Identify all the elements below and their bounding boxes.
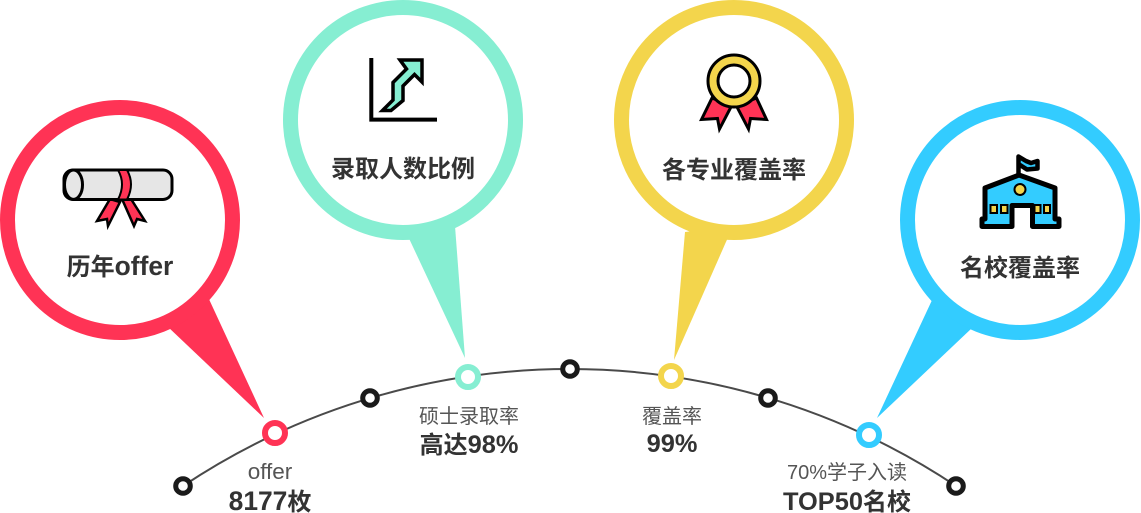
node: mint	[458, 367, 478, 387]
pin: historic offers	[8, 108, 264, 418]
label: top 50 schools: 70%学子入读	[787, 461, 907, 484]
heading: top school coverage: 名校覆盖率	[960, 255, 1080, 282]
icon: diploma scroll	[64, 170, 172, 226]
label: offer count: offer	[248, 459, 293, 484]
label: top 50 schools	[783, 461, 911, 513]
pin: major coverage	[622, 8, 846, 360]
icon: school building	[982, 156, 1059, 226]
label: coverage rate	[642, 405, 702, 458]
heading: major coverage: 各专业覆盖率	[662, 156, 806, 184]
pin: admission ratio	[290, 8, 516, 358]
icon: rising arrow chart	[371, 58, 437, 120]
label: master admission rate: 高达98%	[420, 431, 518, 459]
heading: historic offers: 历年offer	[67, 251, 173, 281]
label: coverage rate: 99%	[647, 430, 697, 458]
heading: admission ratio: 录取人数比例	[331, 156, 475, 183]
label: offer count	[229, 459, 311, 513]
timeline nodes	[176, 362, 963, 493]
label: coverage rate: 覆盖率	[642, 405, 702, 428]
node: yellow	[661, 366, 681, 386]
node: blue	[859, 425, 879, 445]
label: master admission rate	[419, 405, 519, 459]
timeline arc	[183, 369, 956, 486]
label: master admission rate: 硕士录取率	[419, 405, 519, 428]
pin: top school coverage	[877, 108, 1132, 418]
node: red	[265, 423, 285, 443]
icon: award rosette	[702, 55, 766, 129]
